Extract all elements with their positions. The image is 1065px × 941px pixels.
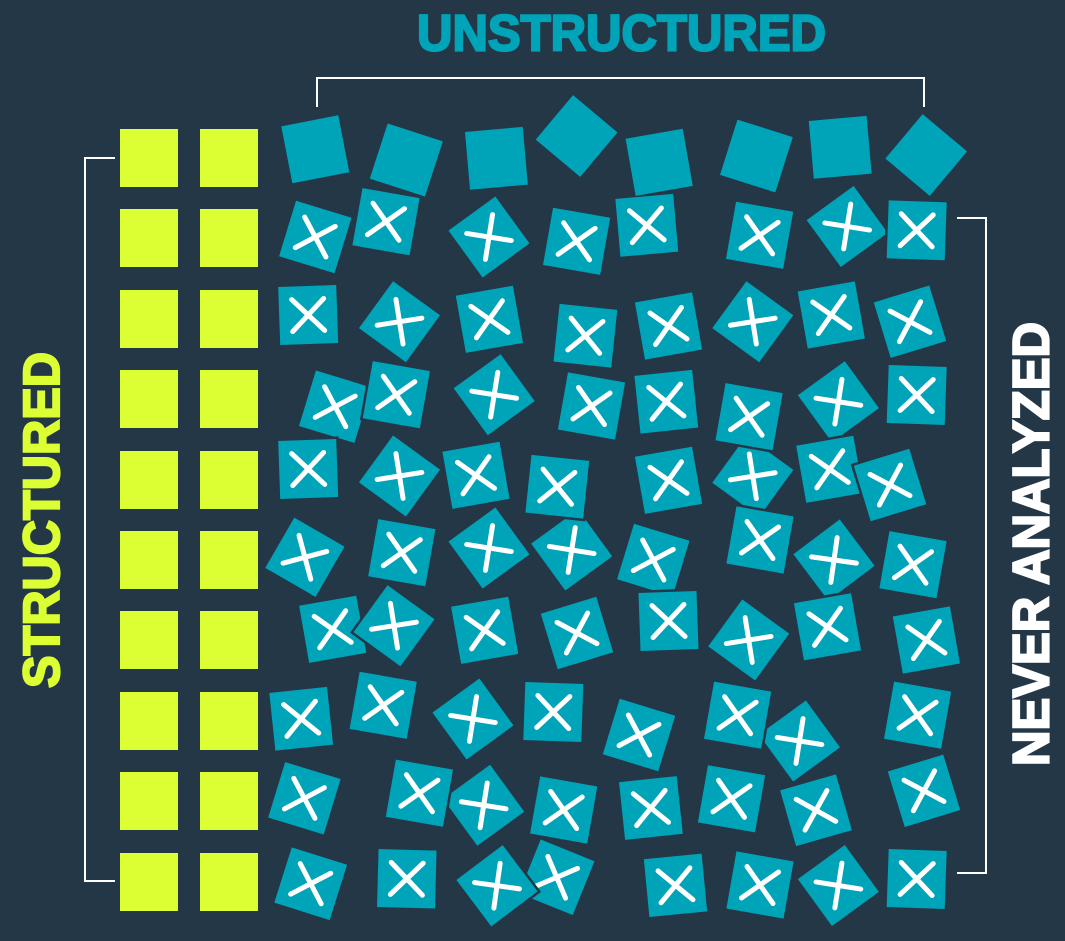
bracket: never analyzed	[957, 218, 986, 873]
analyzed unstructured squares row	[281, 95, 967, 197]
structured squares grid	[120, 129, 258, 911]
never analyzed crossed squares	[262, 183, 963, 930]
bracket: structured	[85, 158, 115, 881]
heading: structured: STRUCTURED	[13, 352, 70, 688]
bracket: unstructured	[317, 78, 924, 107]
heading: unstructured: UNSTRUCTURED	[417, 5, 826, 62]
heading: never analyzed: NEVER ANALYZED	[1002, 322, 1059, 766]
